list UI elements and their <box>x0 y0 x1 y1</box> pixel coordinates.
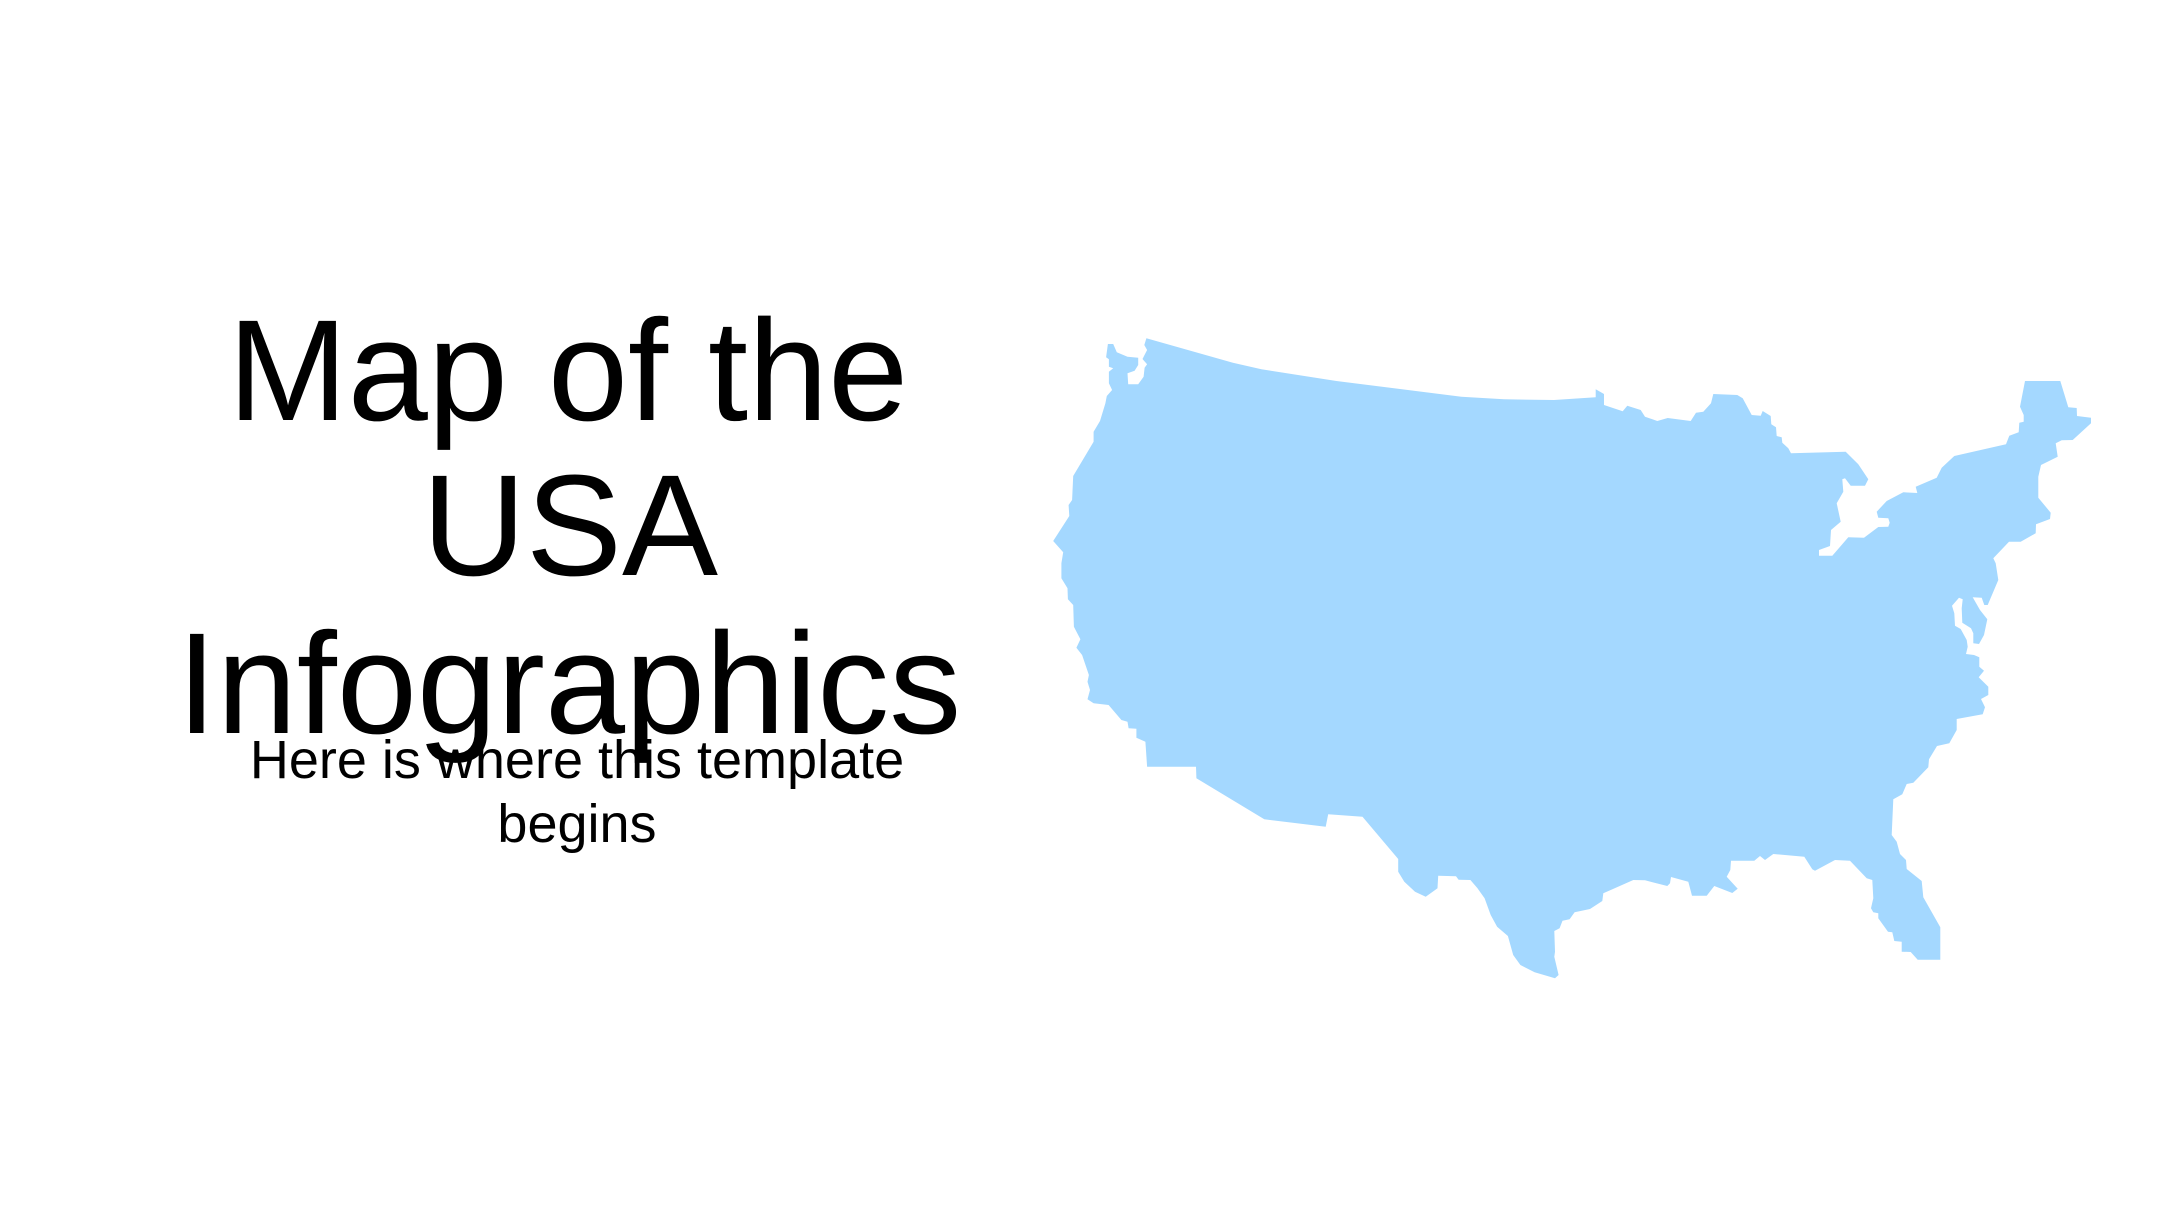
map of the USA <box>1053 338 2091 978</box>
subtitle: begins <box>497 794 657 854</box>
title <box>177 290 961 764</box>
subtitle <box>250 730 904 854</box>
title: Infographics <box>177 603 961 764</box>
title: USA <box>422 445 718 606</box>
title: Map of the <box>228 290 908 451</box>
subtitle: Here is where this template <box>250 730 904 790</box>
